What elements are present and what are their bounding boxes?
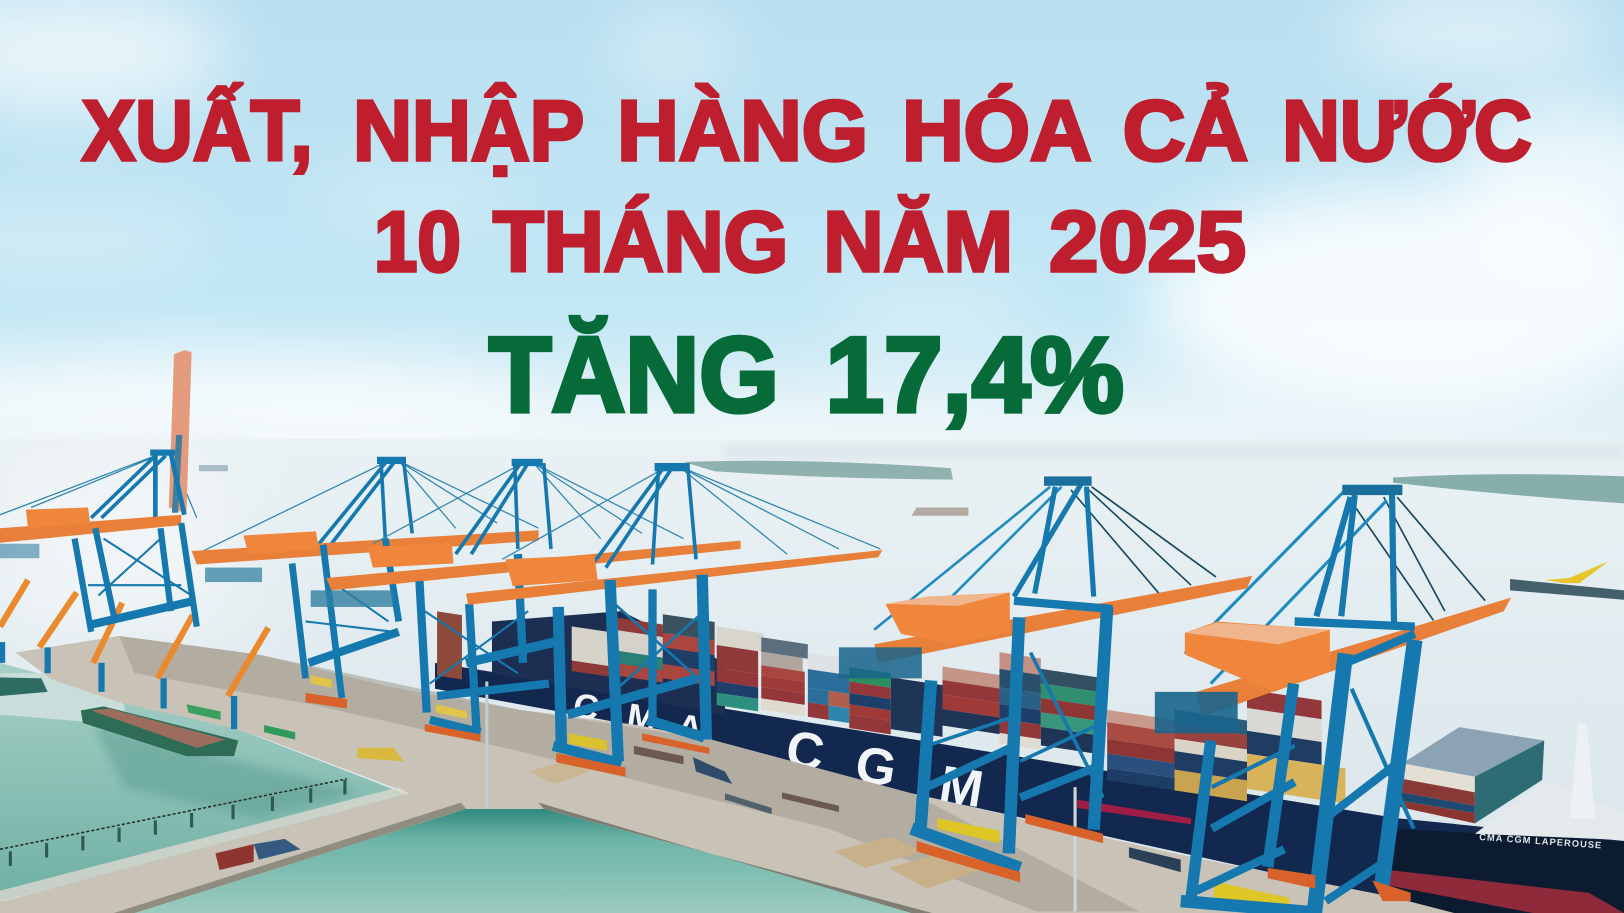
crane 5 (839, 476, 1252, 882)
hull lettering CMA CGM: C (782, 719, 828, 782)
title line 1: CẢ (1123, 83, 1248, 178)
ship name: CMA CGM LAPEROUSE (1479, 832, 1603, 851)
growth figure (489, 315, 1124, 435)
crane 2 (192, 457, 539, 708)
hull lettering CMA CGM: M (936, 754, 987, 818)
quay deck (0, 636, 1454, 913)
sea and distant shore (0, 439, 1624, 913)
deck containers (437, 568, 1345, 816)
hull lettering CMA CGM: M (624, 696, 659, 740)
title line 1: XUẤT, (82, 83, 313, 178)
title line 1 (82, 83, 1532, 178)
crane 3 (311, 459, 741, 742)
hull lettering CMA CGM: G (852, 735, 901, 798)
crane 1 (0, 350, 197, 632)
hull lettering CMA CGM (570, 686, 987, 818)
container ship hull (435, 611, 1624, 913)
growth figure: TĂNG (489, 315, 779, 435)
quay vehicles and cargo (0, 675, 1289, 912)
aft container block and ship mast (1399, 723, 1595, 823)
title line 1: NƯỚC (1282, 83, 1532, 178)
crane 6 (1155, 485, 1511, 913)
water basins (0, 663, 932, 913)
title line 2 (374, 194, 1246, 289)
title line 1: HÓA (902, 83, 1092, 178)
hull lettering CMA CGM: A (674, 707, 705, 749)
headline (82, 83, 1532, 435)
title line 1: HÀNG (617, 83, 868, 178)
sky with clouds (0, 0, 1624, 453)
title line 2: 10 (374, 194, 461, 289)
shore cranes (0, 580, 268, 729)
title line 1: NHẬP (353, 83, 584, 178)
title line 2: NĂM (823, 194, 1013, 289)
title line 2: 2025 (1049, 194, 1246, 289)
growth figure: 17,4% (825, 315, 1124, 435)
crane 4 (466, 463, 882, 777)
hull lettering CMA CGM: C (570, 686, 602, 729)
title line 2: THÁNG (493, 194, 788, 289)
